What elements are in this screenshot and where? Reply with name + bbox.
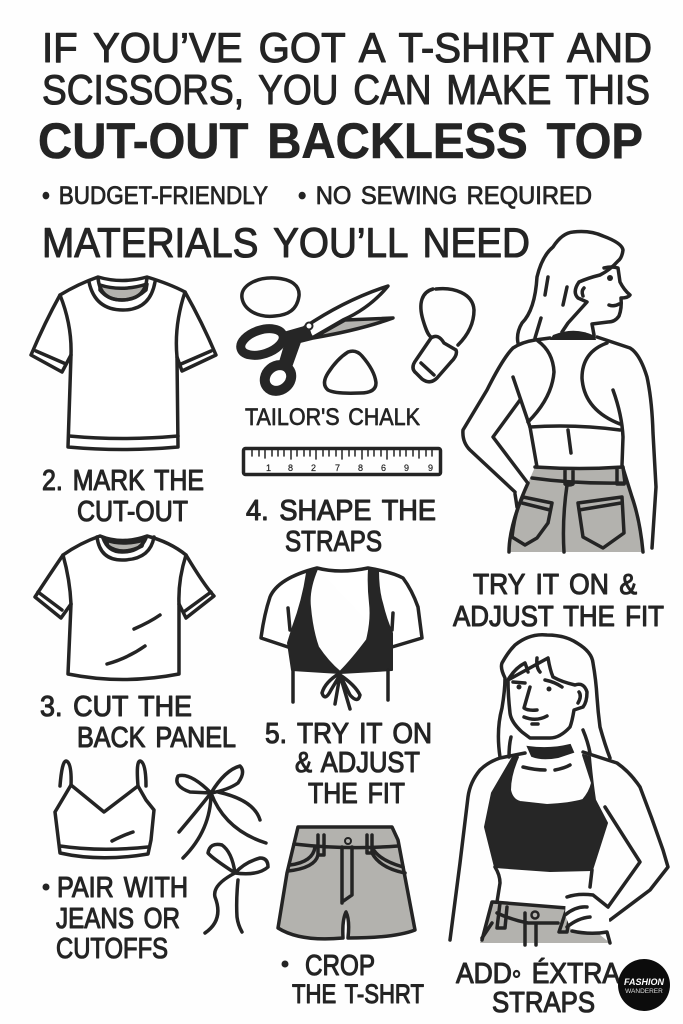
benefit bullets: • NO SEWING REQUIRED xyxy=(298,182,592,210)
icon: ruler: 8 xyxy=(288,463,293,473)
icon: ribbon bow xyxy=(177,766,266,858)
icon: ruler xyxy=(244,448,440,474)
label: step 4 xyxy=(246,495,436,558)
label: step 5: 5. TRY IT ON xyxy=(265,718,432,750)
label: step 5: THE FIT xyxy=(308,778,405,810)
label: step 5: & ADJUST xyxy=(295,747,420,779)
illustration: woman back view xyxy=(463,232,656,552)
caption: try it on and adjust xyxy=(453,569,664,633)
icon: denim shorts xyxy=(278,827,415,939)
label: pair with jeans: PAIR WITH xyxy=(57,872,188,904)
label: tailor's chalk: TAILOR'S CHALK xyxy=(245,404,420,431)
icon: ruler: 7 xyxy=(335,463,340,473)
icon: chalk holder xyxy=(413,289,474,382)
label: step 4: 4. SHAPE THE xyxy=(246,495,436,527)
label: step 2: 2. MARK THE xyxy=(42,465,204,497)
label: crop the t-shirt: CROP xyxy=(305,950,375,982)
heading: materials: MATERIALS YOU’LL NEED xyxy=(42,219,530,266)
label: pair with jeans xyxy=(42,872,188,965)
icon: chalk oval xyxy=(242,278,299,316)
logo badge: FASHION xyxy=(624,977,664,987)
icon: camisole xyxy=(55,761,154,858)
icon: ruler: 1 xyxy=(266,463,271,473)
logo badge: WANDERER xyxy=(625,988,663,995)
title: IF YOU’VE GOT A T-SHIRT AND xyxy=(42,24,652,71)
label: step 4: STRAPS xyxy=(285,526,382,558)
label: step 5 xyxy=(265,718,432,810)
benefit bullets xyxy=(42,182,592,210)
label: crop the t-shirt xyxy=(282,950,424,1009)
label: step 2: CUT-OUT xyxy=(77,496,188,528)
icon: short t-shirt xyxy=(35,536,214,680)
icon: ruler: 9 xyxy=(428,463,433,473)
caption: try it on and adjust: ADJUST THE FIT xyxy=(453,601,664,633)
icon: chalk triangle xyxy=(324,351,376,393)
label: step 3: 3. CUT THE xyxy=(40,691,192,723)
label: pair with jeans: JEANS OR xyxy=(56,903,180,935)
label: add extra straps xyxy=(456,957,621,1019)
label: add extra straps: ADD◦ ÉXTRA xyxy=(456,957,621,990)
label: add extra straps: STRAPS xyxy=(492,987,595,1019)
label: crop the t-shirt: THE T-SHRT xyxy=(292,979,424,1009)
illustration: backless top with tie xyxy=(261,568,422,709)
caption: try it on and adjust: TRY IT ON & xyxy=(473,569,637,601)
title: CUT-OUT BACKLESS TOP xyxy=(38,113,643,169)
icon: ruler: 9 xyxy=(404,463,409,473)
icon: scissors xyxy=(237,286,393,396)
icon: ruler: 6 xyxy=(381,463,386,473)
icon: ruler: 2 xyxy=(311,463,316,473)
illustration: woman front view xyxy=(450,635,668,945)
title xyxy=(38,24,652,169)
logo badge xyxy=(618,959,670,1011)
label: pair with jeans: CUTOFFS xyxy=(56,933,168,965)
label: step 3 xyxy=(40,691,236,754)
icon: ruler: 8 xyxy=(358,463,363,473)
icon: ribbon bow small xyxy=(205,844,268,933)
label: step 3: BACK PANEL xyxy=(77,722,236,754)
icon: t-shirt xyxy=(31,277,216,450)
benefit bullets: • BUDGET-FRIENDLY xyxy=(42,182,268,210)
label: step 2 xyxy=(42,465,204,528)
